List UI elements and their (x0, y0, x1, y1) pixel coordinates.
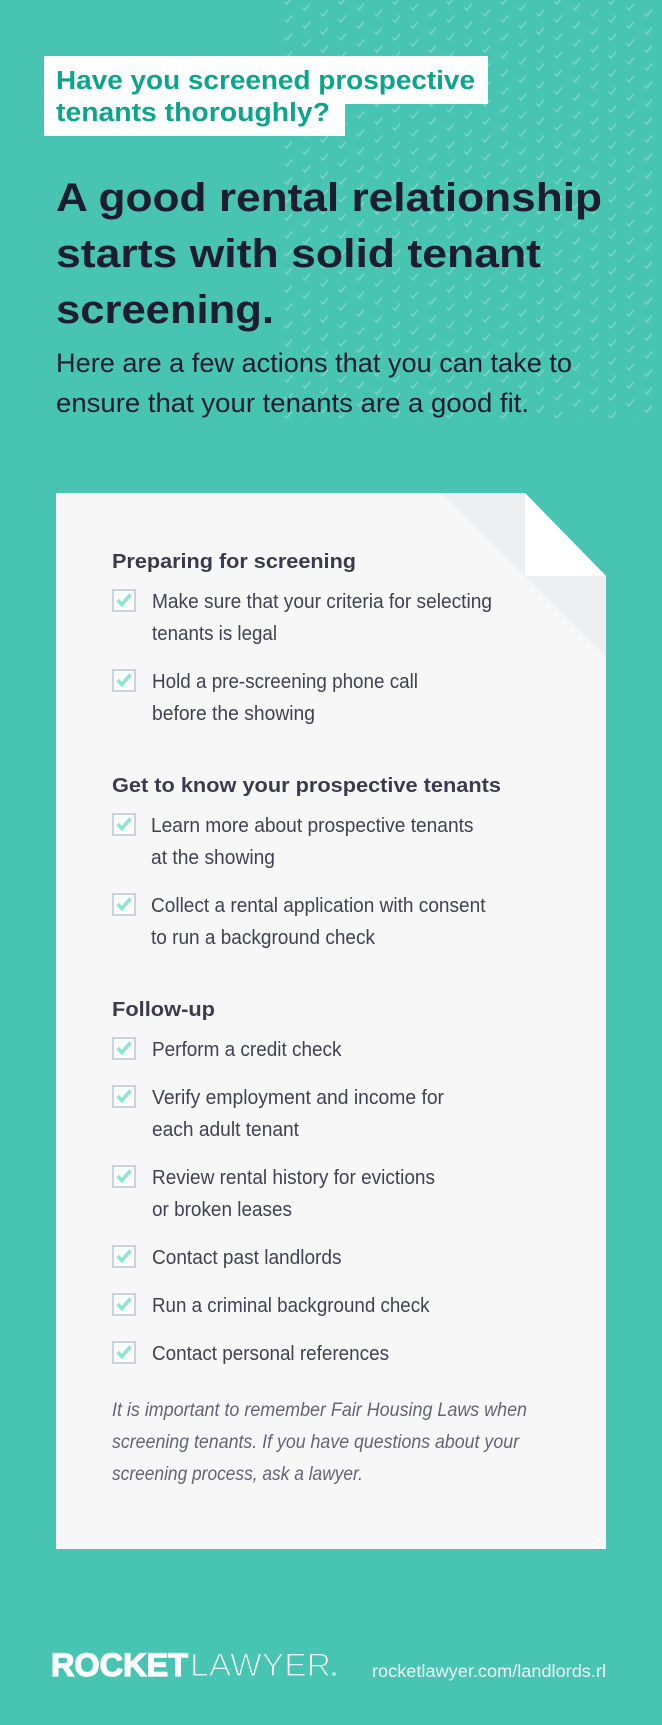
checklist item: legal criteria: Make sure that your criteria for selecting (152, 591, 492, 613)
paper sheet (56, 493, 606, 1549)
title: A good rental relationship (56, 176, 602, 220)
checklist item: rental history (113, 1166, 435, 1221)
legal note: It is important to remember Fair Housing Laws when (112, 1399, 527, 1421)
title (56, 176, 602, 332)
checklist item: phone call: before the showing (152, 703, 315, 725)
heading: Get to know your prospective tenants (112, 775, 501, 797)
checklist item: phone call (113, 670, 418, 725)
panel: checklist paper (56, 493, 606, 1549)
check mark pattern (279, 0, 662, 418)
logo: Rocket Lawyer (51, 1647, 336, 1683)
folded corner shadow (442, 493, 606, 656)
checklist item: learn more (113, 814, 474, 869)
checklist item: rental application (113, 894, 486, 949)
folded corner flap (525, 493, 606, 576)
heading: Preparing for screening (112, 551, 356, 573)
checklist item: criminal background: Run a criminal background check (152, 1295, 430, 1317)
section: follow-up (112, 999, 444, 1365)
heading: Follow-up (112, 999, 215, 1021)
title: screening. (56, 288, 274, 332)
checklist item: personal references: Contact personal references (152, 1343, 389, 1365)
checklist item: learn more: at the showing (151, 847, 275, 869)
subtitle (56, 348, 572, 418)
checklist item: employment and income (113, 1086, 444, 1141)
checklist item: legal criteria (113, 590, 492, 645)
legal note: screening process, ask a lawyer. (112, 1463, 363, 1485)
kicker label: Have you screened prospective (56, 67, 475, 95)
kicker label (44, 56, 488, 136)
section: preparing for screening (112, 551, 492, 725)
subtitle: Here are a few actions that you can take to (56, 348, 572, 378)
website url: rocketlawyer.com/landlords.rl (372, 1661, 606, 1681)
checklist item: phone call: Hold a pre-screening phone call (152, 671, 418, 693)
legal note: screening tenants. If you have questions about your (112, 1431, 520, 1453)
logo: Rocket Lawyer: ROCKET (51, 1647, 188, 1683)
section: get to know your prospective tenants (112, 775, 501, 949)
checklist item: employment and income: each adult tenant (152, 1119, 299, 1141)
checklist item: employment and income: Verify employment and income for (152, 1087, 444, 1109)
checklist item: past landlords: Contact past landlords (152, 1247, 342, 1269)
logo: Rocket Lawyer: LAWYER (190, 1647, 331, 1683)
checklist item: learn more: Learn more about prospective tenants (151, 815, 474, 837)
kicker label: tenants thoroughly? (56, 99, 330, 127)
checklist item: rental application: Collect a rental application with consent (151, 895, 486, 917)
checklist item: rental history: Review rental history for evictions (152, 1167, 435, 1189)
checklist item: credit check: Perform a credit check (152, 1039, 342, 1061)
checklist item: legal criteria: tenants is legal (152, 623, 277, 645)
title: starts with solid tenant (56, 232, 541, 276)
legal note (112, 1399, 527, 1485)
checklist item: rental application: to run a background check (151, 927, 376, 949)
checklist item: rental history: or broken leases (152, 1199, 292, 1221)
subtitle: ensure that your tenants are a good fit. (56, 388, 529, 418)
